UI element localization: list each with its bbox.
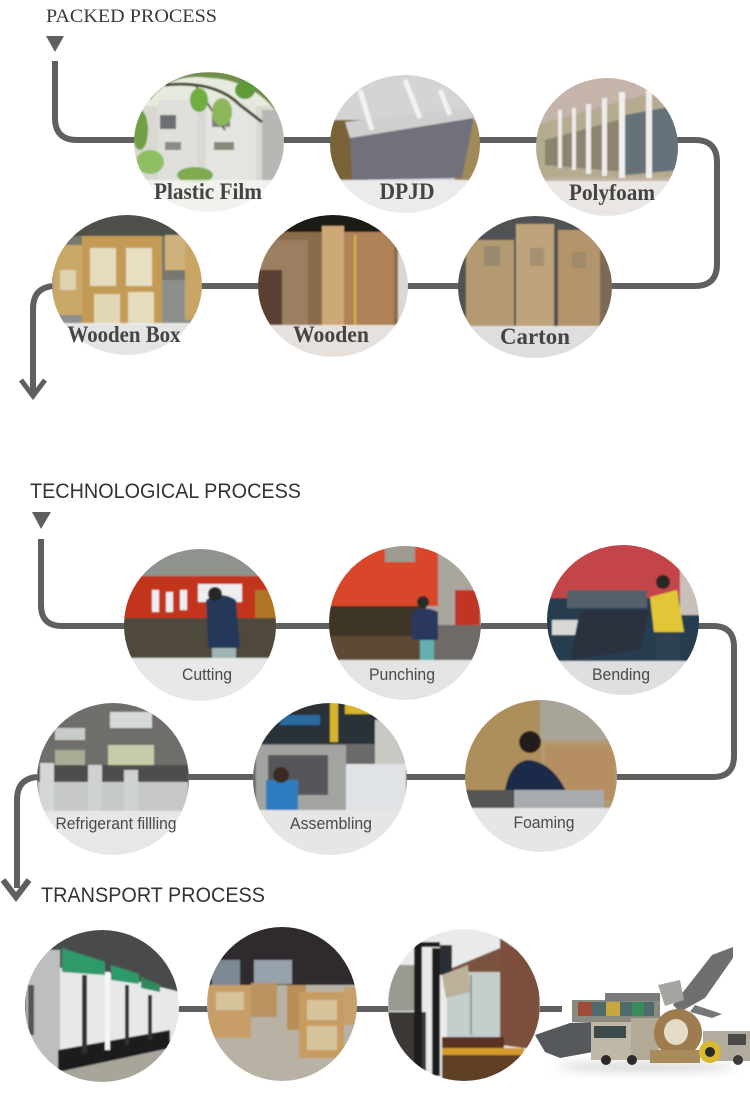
photo: forklift loading container <box>386 928 544 1085</box>
icon: start triangle <box>32 512 51 529</box>
photo: polyfoam <box>534 76 680 217</box>
caption: cutting: Cutting <box>182 665 232 684</box>
photo: refrigerators in warehouse <box>24 928 182 1086</box>
panel: packed process <box>21 6 717 396</box>
photo: wooden box <box>50 212 205 359</box>
caption: DPJD: DPJD <box>380 179 434 204</box>
photo: punching <box>326 544 484 704</box>
caption: polyfoam: Polyfoam <box>569 180 655 205</box>
photo: wooden crates in warehouse <box>205 925 360 1085</box>
caption: refrigerant filling: Refrigerant fillling <box>56 814 176 833</box>
heading: packed process: PACKED PROCESS <box>46 6 217 27</box>
photo: assembling <box>251 700 409 858</box>
photo: DPJD <box>328 72 483 217</box>
heading: transport process: TRANSPORT PROCESS <box>41 884 265 907</box>
panel: technological process <box>3 480 734 897</box>
photo: cutting <box>122 546 280 704</box>
caption: foaming: Foaming <box>514 813 574 832</box>
arrow: down to technological process <box>21 380 45 396</box>
caption: punching: Punching <box>369 665 435 684</box>
caption: plastic film: Plastic Film <box>154 179 262 204</box>
icon: start triangle <box>46 36 64 52</box>
illustration: global logistics (ship, truck, plane, globe, van) <box>535 947 750 1071</box>
caption: wooden box: Wooden Box <box>68 322 181 347</box>
caption: wooden: Wooden <box>293 322 369 347</box>
photo: foaming <box>463 698 621 856</box>
flow line: technological process <box>17 539 734 888</box>
caption: bending: Bending <box>592 665 650 684</box>
photo: refrigerant filling <box>35 700 191 860</box>
photo: wooden <box>255 212 411 360</box>
photo: bending <box>544 542 702 700</box>
photo: plastic film <box>130 70 290 215</box>
arrow: down to transport process <box>3 880 29 897</box>
flow line: packed process <box>33 61 717 394</box>
flow line: transport connectors <box>175 1006 562 1012</box>
heading: technological process: TECHNOLOGICAL PROCESS <box>30 480 301 503</box>
panel: transport process <box>24 884 750 1086</box>
photo: carton <box>456 214 614 360</box>
caption: carton: Carton <box>500 324 570 349</box>
caption: assembling: Assembling <box>290 814 372 833</box>
